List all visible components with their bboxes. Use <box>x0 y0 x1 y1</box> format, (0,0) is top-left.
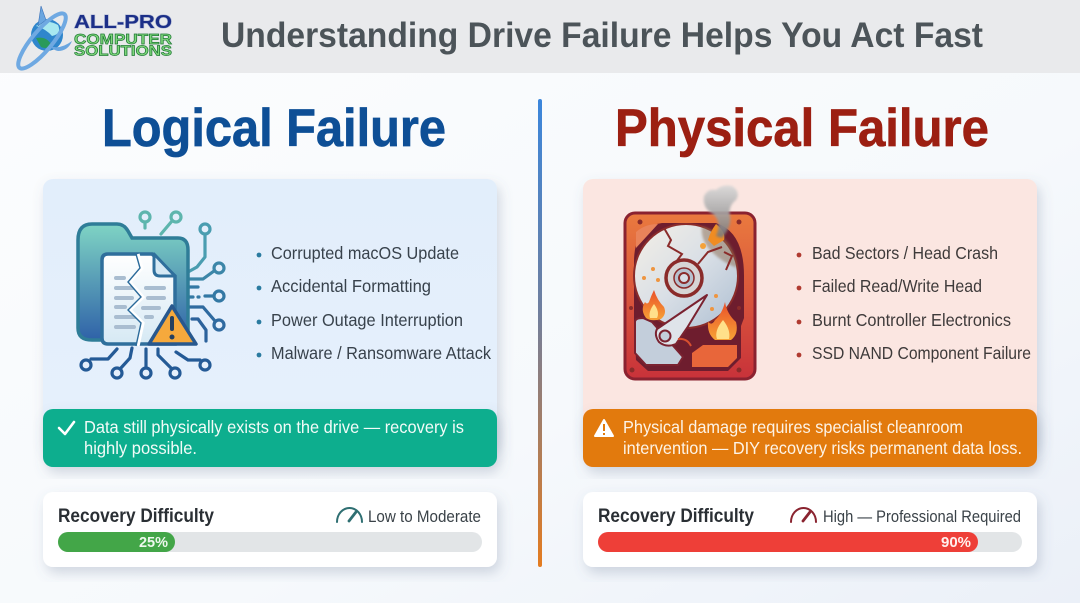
progress bar 90% <box>598 532 1022 552</box>
header bar <box>0 0 1080 74</box>
logo <box>12 6 172 74</box>
card: logical recovery difficulty <box>43 492 497 567</box>
icon: broken file folder with circuits <box>78 212 224 378</box>
bullet list: logical causes: Corrupted macOS Update <box>271 243 459 263</box>
logo: ALL-PRO <box>74 12 172 32</box>
title: Understanding Drive Failure Helps You Act Fast <box>221 16 983 55</box>
card: physical recovery difficulty <box>583 492 1037 567</box>
heading: physical failure: Physical Failure <box>615 99 989 158</box>
panel: logical failure <box>43 179 497 449</box>
callout: specialist required: Physical damage requires specialist cleanroom <box>623 417 963 437</box>
bullet list: physical causes: Failed Read/Write Head <box>812 276 982 296</box>
icon: burning hard drive <box>625 186 755 379</box>
heading: logical failure: Logical Failure <box>102 99 446 158</box>
flames <box>642 224 737 340</box>
bullet list: logical causes: Malware / Ransomware Attack <box>271 343 491 363</box>
icon: warning triangle <box>149 306 196 344</box>
bullet list: logical causes: Power Outage Interruption <box>271 310 463 330</box>
logo: SOLUTIONS <box>74 44 172 60</box>
icon: gauge <box>791 508 816 522</box>
bullet list: logical causes <box>257 243 491 363</box>
progress bar 25% <box>58 532 482 552</box>
bullet list: physical causes: Burnt Controller Electronics <box>812 310 1011 330</box>
center divider <box>538 99 542 567</box>
card: physical recovery difficulty: High — Professional Required <box>823 508 1021 526</box>
callout: specialist required: intervention — DIY recovery risks permanent data loss. <box>623 438 1022 458</box>
bullet list: logical causes: Accidental Formatting <box>271 276 431 296</box>
bullet list: physical causes: SSD NAND Component Failure <box>812 343 1031 363</box>
panel: physical failure <box>583 179 1037 449</box>
card: physical recovery difficulty: Recovery Difficulty <box>598 506 754 527</box>
arm assembly <box>635 295 737 367</box>
card: logical recovery difficulty: Recovery Difficulty <box>58 506 214 527</box>
icon: gauge <box>337 508 362 522</box>
progress bar 90%: 90% <box>941 535 971 551</box>
logo: COMPUTER <box>74 31 172 48</box>
icon: check mark <box>59 422 74 434</box>
callout: specialist required <box>583 409 1037 467</box>
progress bar 25%: 25% <box>139 535 168 551</box>
bullet list: physical causes <box>797 243 1031 363</box>
smoke <box>704 186 738 238</box>
bullet list: physical causes: Bad Sectors / Head Crash <box>812 243 998 263</box>
icon: warning <box>595 420 613 436</box>
callout: recovery possible: Data still physically exists on the drive — recovery is <box>84 417 464 437</box>
card: logical recovery difficulty: Low to Moderate <box>368 508 481 526</box>
callout: recovery possible: highly possible. <box>84 438 197 458</box>
callout: recovery possible <box>43 409 497 467</box>
